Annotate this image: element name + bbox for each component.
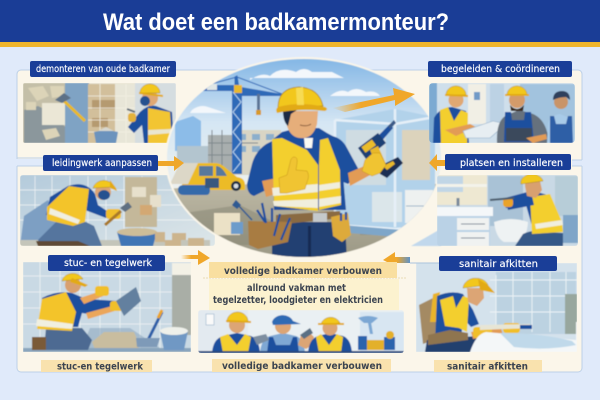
illustration: begeleiden en coördineren	[429, 83, 575, 146]
thumbs-up glove	[279, 157, 308, 193]
hi-vis vest	[272, 138, 341, 211]
tee collar	[304, 138, 313, 148]
caption: stuc-en tegelwerk: stuc-en tegelwerk	[57, 362, 143, 372]
sleeve left	[247, 140, 285, 196]
left buildings	[175, 116, 201, 151]
label: begeleiden en coördineren	[428, 61, 572, 77]
caption: sanitair afkitten: sanitair afkitten	[447, 362, 528, 372]
text: allround vakman description: allround vakman met	[247, 283, 346, 294]
header band	[0, 0, 600, 47]
label: volledige badkamer verbouwen top: volledige badkamer verbouwen	[224, 266, 382, 277]
arrow: towards begeleiden	[332, 88, 415, 112]
halo around scene	[165, 57, 443, 259]
label: sanitair afkitten navy: sanitair afkitten	[459, 259, 538, 270]
label: begeleiden en coördineren: begeleiden & coördineren	[441, 64, 560, 75]
title: Wat doet een badkamermonteur?	[103, 9, 449, 36]
label: leidingwerk aanpassen	[43, 155, 158, 171]
sleeve right	[332, 136, 360, 184]
forearm left	[262, 177, 285, 197]
arrow: towards sanitair	[383, 252, 440, 266]
center text block background	[203, 278, 407, 311]
label: demonteren van oude badkamer: demonteren van oude badkamer	[36, 64, 171, 75]
cable coils	[178, 185, 210, 195]
label: demonteren van oude badkamer	[30, 61, 176, 77]
arrow: from leidingwerk	[158, 156, 184, 171]
label: sanitair afkitten navy	[439, 256, 557, 271]
label: platsen en installeren	[445, 154, 571, 170]
label: volledige badkamer verbouwen top	[209, 262, 397, 278]
label: platsen en installeren: platsen en installeren	[460, 158, 563, 169]
illustration: leidingwerk aanpassen	[20, 175, 215, 246]
illustration: sanitair afkitten	[416, 263, 577, 352]
illustration: central worker scene	[160, 55, 450, 260]
label: leidingwerk aanpassen: leidingwerk aanpassen	[52, 158, 152, 169]
panel: cream content background	[15, 70, 584, 372]
illustration: stuc- en tegelwerk	[23, 262, 191, 352]
text: allround vakman description: tegelzetter, loodgieter en elektricien	[213, 295, 383, 306]
text: allround vakman description	[213, 283, 383, 306]
head and hard hat	[286, 111, 318, 138]
forearm right	[348, 164, 372, 186]
ground	[160, 184, 440, 260]
caption: volledige badkamer verbouwen bottom: volledige badkamer verbouwen	[222, 361, 382, 372]
car	[170, 163, 245, 191]
crane	[202, 76, 282, 174]
label: stuc- en tegelwerk navy	[48, 255, 165, 271]
illustration: demonteren van oude badkamer	[23, 83, 176, 143]
illustration: plaatsen en installeren	[437, 174, 578, 246]
arrow: from stuc- en tegelwerk	[181, 250, 210, 265]
tool belt	[276, 211, 341, 225]
wedge lower right	[411, 227, 444, 246]
drill and glove	[376, 124, 393, 143]
label: stuc- en tegelwerk navy: stuc- en tegelwerk	[64, 258, 152, 269]
clouds	[190, 69, 380, 113]
worker legs	[272, 222, 347, 260]
glass cabin	[335, 109, 437, 237]
illustration: team of specialists	[198, 310, 404, 353]
worker shirt	[272, 128, 346, 210]
arrow: towards platsen	[429, 154, 445, 171]
